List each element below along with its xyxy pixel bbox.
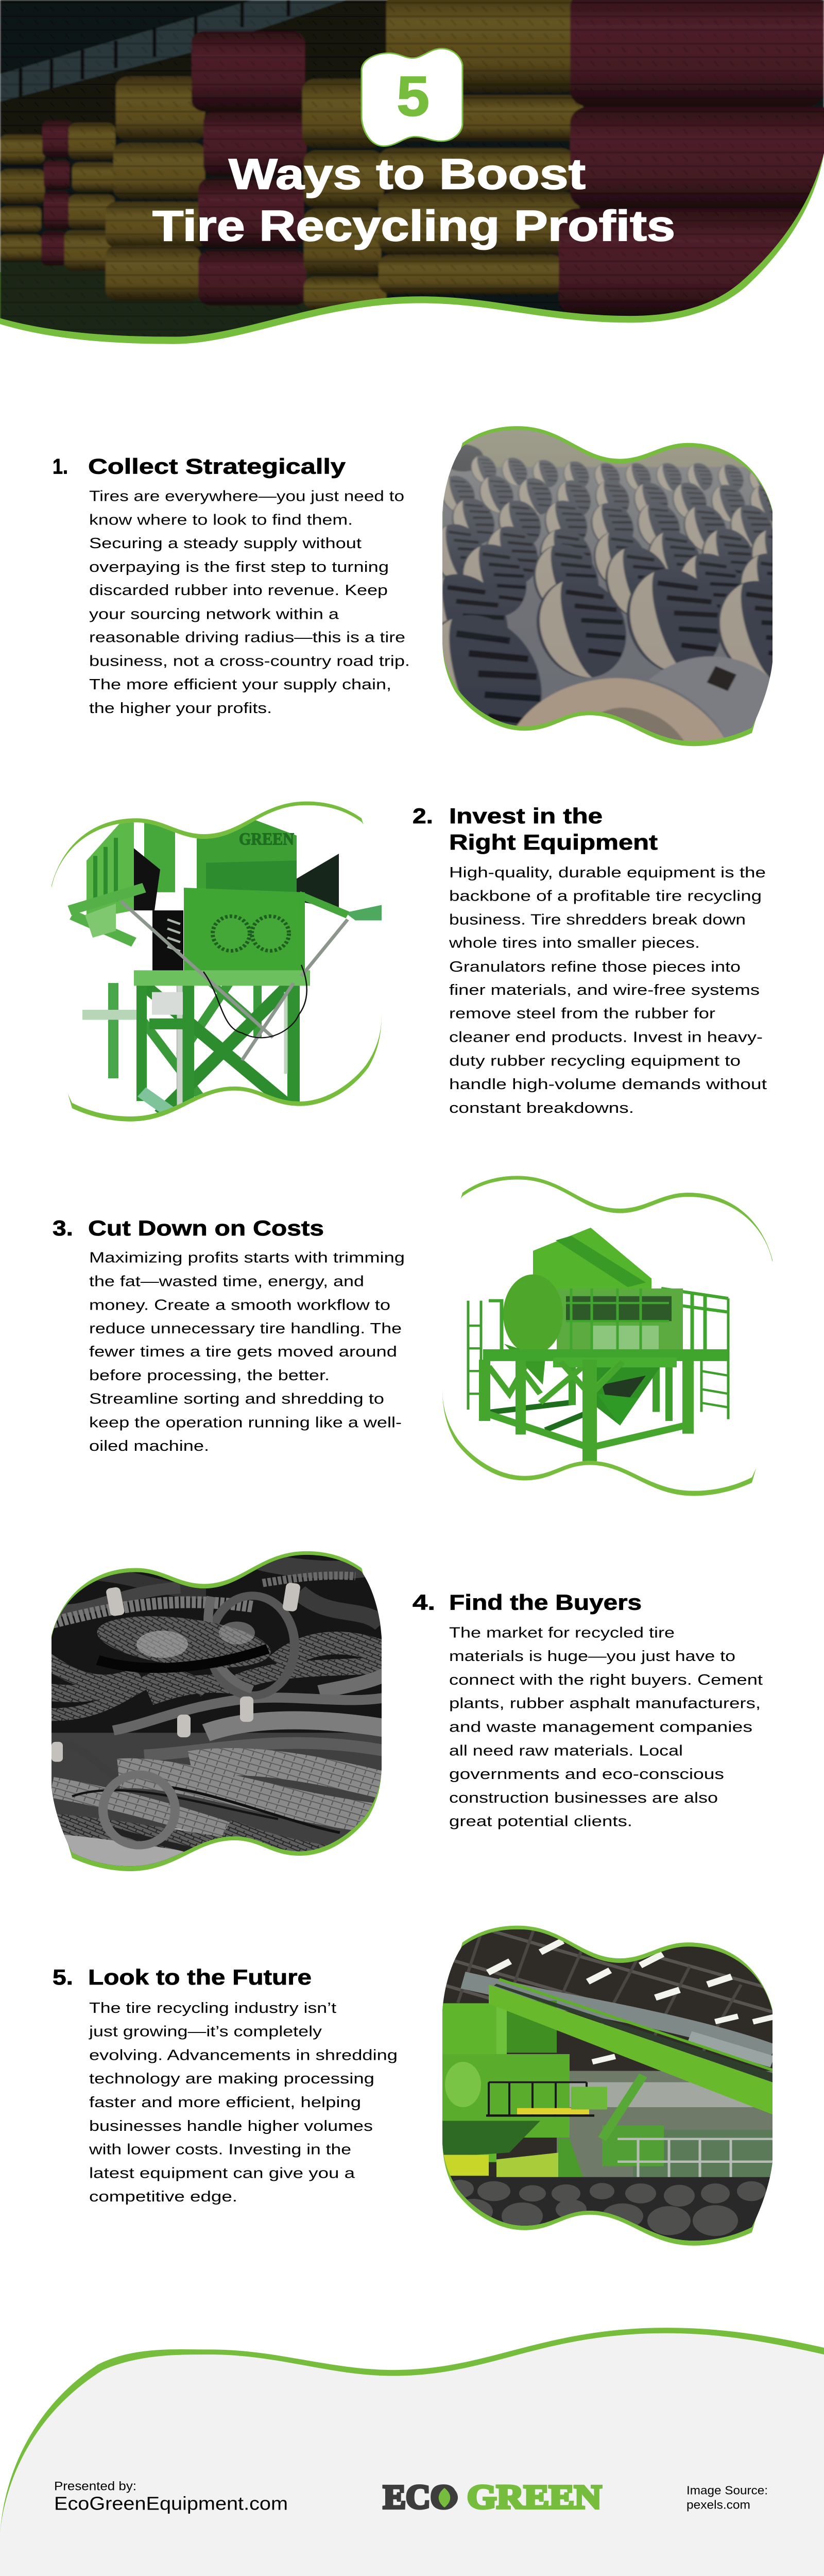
- body text 3: Streamline sorting and shredding to: [89, 1390, 384, 1407]
- footer panel: [0, 2328, 824, 2576]
- rear legs and cross bracing: [82, 974, 294, 1119]
- body text 1: overpaying is the first step to turning: [89, 558, 389, 575]
- heading 2: Right Equipment: [449, 831, 658, 854]
- body text 1: discarded rubber into revenue. Keep: [89, 582, 388, 598]
- body text 1: know where to look to find them.: [89, 511, 353, 528]
- central worn tire: [93, 1608, 274, 1676]
- heading 4: 4.: [413, 1591, 435, 1615]
- heading 2: [413, 804, 658, 854]
- logo: eco green: ECO: [383, 2479, 457, 2516]
- heading 5: Look to the Future: [88, 1966, 312, 1990]
- body text 2: handle high-volume demands without: [449, 1076, 767, 1093]
- ladders: [468, 1301, 481, 1412]
- image source credit: Image Source:: [686, 2484, 768, 2497]
- body text 2: [449, 864, 767, 1116]
- yellow guards: [442, 2155, 489, 2176]
- body text 5: businesses handle higher volumes: [89, 2117, 373, 2134]
- body text 4: and waste management companies: [449, 1718, 752, 1735]
- silver duct: [463, 1980, 772, 2053]
- image: green tire shredder on stand: GREEN: [239, 829, 294, 849]
- body text 4: all need raw materials. Local: [449, 1742, 683, 1759]
- body text 1: [89, 487, 410, 716]
- shredder tower: [442, 2003, 496, 2162]
- image: green granulator on platform: [440, 1174, 780, 1500]
- upper hopper: [533, 1228, 651, 1290]
- footer grey background: [0, 2333, 824, 2576]
- body text 3: money. Create a smooth workflow to: [89, 1296, 390, 1313]
- body text 1: reasonable driving radius—this is a tire: [89, 629, 405, 646]
- front legs: [485, 1360, 688, 1462]
- heading 1: 1.: [53, 455, 68, 479]
- image source credit: pexels.com: [686, 2499, 750, 2512]
- body text 1: Tires are everywhere—you just need to: [89, 487, 404, 504]
- section 4: find the buyers: [46, 1551, 763, 1873]
- right flap and conveyor: [297, 854, 339, 908]
- body text 4: great potential clients.: [449, 1813, 632, 1829]
- section 5: look to the future: [53, 1926, 777, 2250]
- main title: Tire Recycling Profits: [152, 201, 675, 250]
- body text 5: with lower costs. Investing in the: [89, 2141, 351, 2158]
- body text 4: connect with the right buyers. Cement: [449, 1671, 763, 1688]
- ceiling lights: [486, 1938, 777, 2064]
- image: black and white scrap tires with cable: [46, 1551, 391, 1873]
- section 2: invest in the right equipment: [49, 799, 767, 1126]
- main title: Ways to Boost: [229, 150, 586, 198]
- main shredder body: [184, 888, 305, 974]
- conveyor: [489, 1985, 772, 2114]
- heading 5: 5.: [53, 1966, 73, 1990]
- header photo: stacked painted tires: [0, 0, 824, 345]
- heading 1: Collect Strategically: [88, 455, 346, 479]
- body text 3: Maximizing profits starts with trimming: [89, 1249, 405, 1266]
- header green wave edge: [0, 136, 824, 344]
- body text 1: the higher your profits.: [89, 700, 272, 716]
- body text 2: High-quality, durable equipment is the: [449, 864, 766, 880]
- body text 4: construction businesses are also: [449, 1789, 718, 1806]
- badge number 5: 5: [397, 65, 430, 128]
- number badge: [362, 48, 462, 146]
- body text 1: business, not a cross-country road trip.: [89, 652, 410, 669]
- image source credit: [686, 2484, 768, 2512]
- cable clamps: [52, 1582, 301, 1762]
- section 3: cut down on costs: [53, 1174, 780, 1500]
- body text 2: cleaner end products. Invest in heavy-: [449, 1028, 763, 1045]
- body text 4: materials is huge—you just have to: [449, 1648, 735, 1665]
- side panel: [87, 822, 134, 920]
- tire pile: [442, 2177, 772, 2250]
- heading 2: 2.: [413, 804, 433, 828]
- body text 3: keep the operation running like a well-: [89, 1414, 402, 1431]
- heading 2: Invest in the: [449, 804, 603, 828]
- body text 5: evolving. Advancements in shredding: [89, 2046, 398, 2063]
- body text 5: faster and more efficient, helping: [89, 2094, 361, 2111]
- logo: eco green: [383, 2479, 602, 2516]
- body text 5: competitive edge.: [89, 2188, 237, 2205]
- body text 4: The market for recycled tire: [449, 1624, 675, 1641]
- rotor hubs: [213, 917, 250, 951]
- header banner: [0, 0, 824, 345]
- presenter credit: [54, 2480, 288, 2514]
- ceiling beams: [442, 1926, 772, 2080]
- mid background: [557, 2071, 772, 2180]
- body text 3: reduce unnecessary tire handling. The: [89, 1320, 402, 1337]
- body text 5: just growing—it’s completely: [89, 2023, 322, 2040]
- image: recycling plant with green conveyor: [442, 1926, 777, 2250]
- body text 4: governments and eco-conscious: [449, 1766, 724, 1783]
- body text 3: fewer times a tire gets moved around: [89, 1343, 397, 1360]
- body text 1: your sourcing network within a: [89, 605, 339, 622]
- rear frame and base: [468, 1289, 728, 1448]
- heading 4: Find the Buyers: [449, 1591, 642, 1615]
- machine body: [557, 1289, 683, 1353]
- body text 1: The more efficient your supply chain,: [89, 676, 391, 693]
- body text 5: latest equipment can give you a: [89, 2164, 355, 2181]
- body text 5: [89, 1999, 398, 2205]
- body text 3: the fat—wasted time, energy, and: [89, 1273, 364, 1290]
- body text 2: remove steel from the rubber for: [449, 1005, 715, 1022]
- body text 2: finer materials, and wire-free systems: [449, 981, 760, 998]
- body text 2: Granulators refine those pieces into: [449, 958, 741, 975]
- body text 5: technology are making processing: [89, 2070, 374, 2087]
- body text 3: [89, 1249, 405, 1454]
- body text 5: The tire recycling industry isn’t: [89, 1999, 336, 2016]
- footer green wave: [0, 2328, 824, 2576]
- body text 2: whole tires into smaller pieces.: [449, 934, 700, 951]
- gas struts: [121, 901, 348, 1060]
- body text 4: plants, rubber asphalt manufacturers,: [449, 1695, 761, 1711]
- image: rows of used truck tires: [442, 426, 772, 746]
- cable loops: [210, 1596, 295, 1696]
- platform: [483, 1349, 728, 1361]
- presenter credit: Presented by:: [54, 2480, 136, 2493]
- body text 2: backbone of a profitable tire recycling: [449, 887, 762, 904]
- lower cone: [597, 1367, 660, 1426]
- side drum: [503, 1275, 563, 1354]
- body text 2: duty rubber recycling equipment to: [449, 1052, 741, 1069]
- logo: eco green: GREEN: [467, 2479, 602, 2516]
- body text 4: [449, 1624, 763, 1829]
- body text 2: business. Tire shredders break down: [449, 911, 746, 928]
- heading 3: Cut Down on Costs: [88, 1216, 324, 1240]
- body text 2: constant breakdowns.: [449, 1099, 634, 1116]
- heading 3: 3.: [53, 1216, 73, 1240]
- rear hopper: [197, 820, 297, 889]
- body text 3: before processing, the better.: [89, 1367, 330, 1383]
- catwalk: [489, 2082, 587, 2116]
- section 1: collect strategically: [54, 426, 772, 746]
- presenter credit: EcoGreenEquipment.com: [54, 2494, 288, 2514]
- main title: [152, 150, 675, 250]
- body text 1: Securing a steady supply without: [89, 535, 362, 552]
- body text 3: oiled machine.: [89, 1437, 209, 1454]
- image: green tire shredder on stand: [49, 799, 389, 1126]
